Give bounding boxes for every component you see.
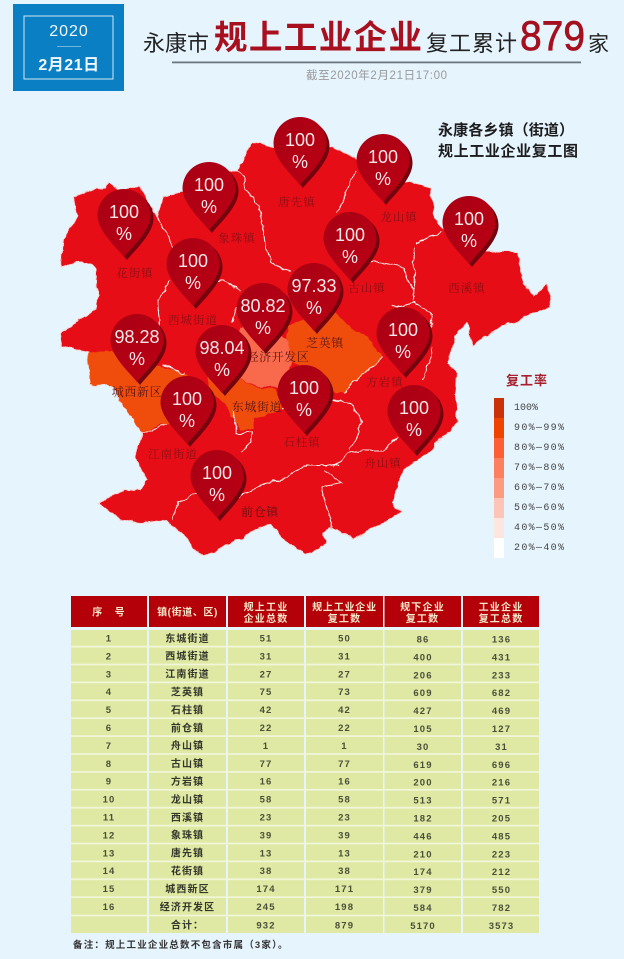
town name labels: 芝英镇: [306, 334, 344, 351]
table header: 复工数: [328, 612, 361, 625]
pin: 舟山镇 100%: [388, 385, 444, 456]
row 10: 513: [413, 796, 433, 807]
row 13: 13: [103, 848, 115, 859]
row 5: [106, 703, 511, 717]
row 12: [103, 829, 511, 842]
legend colour scale: [494, 398, 504, 558]
row 11: 23: [338, 812, 351, 824]
row 12: 12: [103, 830, 115, 841]
map heading: 永康各乡镇（街道）: [438, 121, 574, 139]
pin: 古山镇 100%: 100: [335, 225, 365, 245]
title: 规上工业企业: [214, 20, 422, 57]
row 2: 400: [413, 652, 433, 663]
row 2: 431: [492, 652, 511, 663]
row 2: 西城街道: [165, 650, 210, 663]
pin: 前仓镇 100%: %: [209, 485, 225, 505]
pin: 东城街道 98.04%: [196, 325, 252, 396]
total row: 3573: [489, 921, 514, 932]
region: 芝英镇 (90%–99%): [287, 310, 383, 393]
pin: 舟山镇 100%: 100: [399, 398, 429, 418]
row 16: 16: [103, 902, 115, 913]
row 10: 10: [103, 795, 115, 806]
row 3: 3: [106, 669, 112, 680]
pin: 芝英镇 97.33%: [288, 263, 344, 334]
table header: 规下企业: [400, 600, 445, 614]
table header: 复工总数: [479, 612, 523, 625]
row 7: 31: [495, 742, 508, 753]
row 4: 609: [413, 688, 433, 699]
town name labels: 唐先镇: [278, 194, 316, 210]
row 10: 571: [492, 796, 511, 807]
pin: 龙山镇 100%: [356, 134, 412, 205]
row 4: [106, 686, 511, 699]
row 14: 38: [260, 866, 272, 877]
row 8: 8: [106, 759, 112, 770]
row 4: 73: [338, 687, 351, 698]
pin: 芝英镇 97.33%: 97.33: [291, 276, 337, 296]
pin: 方岩镇 100%: [376, 307, 432, 378]
pin: 方岩镇 100%: %: [395, 342, 411, 362]
legend labels: [514, 403, 564, 554]
pin: 城西新区 98.28%: 98.28: [114, 327, 160, 347]
town name labels: 东城街道: [232, 398, 282, 415]
row 4: 芝英镇: [171, 686, 204, 698]
pin: 经济开发区 80.82%: 80.82: [240, 296, 286, 316]
row 5: 5: [106, 705, 112, 716]
row 9: 9: [106, 777, 112, 788]
row 9: [106, 775, 511, 789]
map heading: 规上工业企业复工图: [438, 142, 578, 160]
row 16: 198: [335, 902, 354, 913]
town name labels: 前仓镇: [241, 503, 279, 520]
pin: 石柱镇 100%: 100: [289, 378, 319, 398]
title: 复工累计: [426, 31, 517, 56]
pin: 方岩镇 100%: 100: [388, 320, 418, 340]
town name labels: 江南街道: [148, 446, 198, 462]
pin: 江南街道 100%: 100: [172, 389, 202, 409]
date badge: 2月21日: [38, 57, 100, 74]
date badge: [13, 4, 124, 91]
pin: 象珠镇 100%: [182, 162, 238, 233]
legend labels: 100%: [514, 403, 538, 414]
row 6: 22: [260, 723, 272, 734]
row 12: 39: [338, 830, 351, 841]
pin: 芝英镇 97.33%: %: [306, 298, 322, 318]
row 11: [103, 811, 511, 824]
data table: [71, 596, 539, 933]
legend labels: 50%—60%: [514, 503, 564, 514]
region: 东城街道 (90%–99%): [207, 377, 283, 430]
row 9: 16: [260, 777, 272, 788]
legend labels: 70%—80%: [514, 463, 564, 474]
row 16: 245: [256, 902, 276, 913]
title: [143, 12, 609, 59]
row 8: 696: [492, 760, 511, 771]
town name labels: 花街镇: [116, 265, 154, 281]
row 4: 4: [106, 687, 112, 698]
row 16: 782: [492, 903, 511, 914]
row 6: [106, 721, 511, 735]
row 9: 216: [492, 778, 511, 789]
row 1: 86: [417, 634, 429, 646]
total row: 合计：: [171, 918, 204, 932]
pin: 西溪镇 100%: 100: [454, 209, 484, 229]
row 14: 花街镇: [171, 864, 204, 878]
pin: 西城街道 100%: 100: [178, 251, 208, 271]
row 6: 105: [413, 724, 433, 735]
row 7: 7: [106, 741, 112, 752]
row 13: 唐先镇: [171, 847, 204, 860]
pin: 西溪镇 100%: %: [461, 231, 477, 251]
table body background: [71, 630, 539, 933]
row 7: 舟山镇: [171, 739, 204, 752]
row 15: 15: [103, 884, 115, 895]
row 15: [103, 882, 511, 896]
pin: 西城街道 100%: [166, 238, 222, 309]
row 15: 171: [335, 884, 354, 895]
row 12: 446: [413, 831, 433, 842]
row 10: 龙山镇: [171, 793, 204, 806]
footnote: 备注：规上工业企业总数不包含市属（3家）。: [73, 939, 289, 951]
total row: 932: [256, 920, 276, 932]
row 1: 1: [106, 634, 112, 644]
pin: 西溪镇 100%: [442, 196, 498, 267]
row 15: 174: [256, 884, 276, 895]
pin: 象珠镇 100%: 100: [194, 175, 224, 195]
row 6: 6: [106, 723, 112, 734]
title: 永康市: [143, 31, 209, 56]
row 7: 1: [341, 741, 348, 752]
pin: 江南街道 100%: %: [179, 411, 195, 431]
legend labels: 40%—50%: [514, 523, 564, 534]
row 12: 485: [492, 831, 511, 842]
row 1: [106, 632, 511, 646]
pin: 花街镇 100%: %: [116, 224, 132, 244]
subtitle: data cut-off time: 截至2020年2月21日17:00: [306, 68, 447, 82]
town name labels: 象珠镇: [218, 230, 256, 246]
row 16: 584: [413, 903, 433, 914]
row 9: 方岩镇: [171, 775, 204, 788]
row 5: 42: [338, 705, 351, 716]
legend labels: 20%—40%: [514, 543, 564, 554]
town name labels: 龙山镇: [380, 209, 418, 225]
pin: 江南街道 100%: [160, 376, 216, 447]
row 1: 136: [492, 634, 511, 646]
pin: 前仓镇 100%: [190, 450, 246, 521]
pin: 唐先镇 100%: %: [292, 152, 308, 172]
pin: 前仓镇 100%: 100: [202, 463, 232, 483]
title rule: [172, 62, 581, 63]
row 2: 31: [338, 651, 351, 662]
row 12: 39: [260, 830, 272, 841]
row 10: [103, 793, 511, 807]
town name labels: 舟山镇: [364, 455, 402, 471]
row 16: 经济开发区: [160, 900, 215, 913]
row 14: [103, 864, 511, 878]
town name labels: 古山镇: [348, 280, 386, 296]
row 12: 象珠镇: [171, 829, 204, 842]
town name labels: 石柱镇: [283, 434, 321, 450]
map fills and boundaries: [60, 142, 550, 557]
town name labels: [112, 194, 486, 520]
pin: 石柱镇 100%: [278, 365, 334, 436]
row 5: 469: [492, 706, 511, 717]
pin: 西城街道 100%: %: [185, 273, 201, 293]
row 11: 西溪镇: [171, 811, 204, 824]
table header: 复工数: [406, 612, 439, 625]
row 11: 11: [103, 812, 115, 824]
pin: 经济开发区 80.82%: [236, 283, 292, 354]
row 15: 城西新区: [165, 882, 210, 895]
legend title: 复工率: [506, 373, 548, 388]
row 8: 77: [338, 759, 351, 770]
row 7: 30: [417, 742, 429, 753]
pin: 唐先镇 100%: 100: [285, 130, 315, 150]
row 14: 212: [492, 867, 511, 878]
legend labels: 80%—90%: [514, 443, 564, 454]
row 4: 75: [260, 687, 272, 698]
row 10: 58: [260, 795, 272, 806]
legend: resumption rate: [494, 373, 564, 558]
pin: 城西新区 98.28%: [110, 314, 166, 385]
row 5: 42: [260, 705, 272, 716]
row 13: 210: [413, 849, 433, 860]
row 3: 233: [492, 670, 511, 681]
row 8: 古山镇: [171, 757, 204, 770]
table header: 工业企业: [479, 600, 523, 614]
pin: 古山镇 100%: [324, 212, 380, 283]
town boundaries: [142, 170, 442, 527]
town name labels: 经济开发区: [246, 348, 310, 365]
row 5: 427: [413, 706, 433, 717]
row 11: 205: [492, 814, 511, 824]
row 6: 22: [338, 723, 351, 734]
table header: [71, 596, 539, 627]
pin: 龙山镇 100%: %: [375, 169, 391, 189]
total row: 879: [335, 920, 354, 932]
row 13: 223: [492, 849, 511, 860]
row 4: 682: [492, 688, 511, 699]
row 13: [103, 847, 511, 860]
map heading: [438, 121, 578, 160]
row 5: 石柱镇: [171, 703, 204, 716]
row 3: [106, 668, 511, 681]
pin: 城西新区 98.28%: %: [129, 349, 145, 369]
legend labels: 90%—99%: [514, 423, 564, 434]
row 14: 38: [338, 866, 351, 877]
date badge: 2020: [49, 23, 89, 40]
row 2: 31: [260, 651, 272, 662]
pin: 唐先镇 100%: [274, 117, 330, 188]
town name labels: 西溪镇: [448, 280, 486, 296]
row 6: 前仓镇: [171, 721, 204, 734]
row 1: 东城街道: [165, 632, 210, 645]
row 1: 51: [260, 634, 272, 644]
row 15: 379: [413, 885, 433, 896]
table header: 镇(街道、区): [157, 606, 218, 618]
pin: 石柱镇 100%: %: [296, 400, 312, 420]
row 11: 23: [260, 812, 272, 824]
total row: 5170: [410, 921, 436, 932]
row 8: [106, 757, 511, 771]
row 6: 127: [492, 724, 511, 735]
pin: 象珠镇 100%: %: [201, 197, 217, 217]
row 3: 27: [260, 669, 272, 680]
pin: 花街镇 100%: 100: [109, 202, 139, 222]
row 10: 58: [338, 795, 351, 806]
pin: 古山镇 100%: %: [342, 247, 358, 267]
row 7: 1: [263, 741, 269, 752]
row 16: [103, 900, 511, 914]
legend labels: 60%—70%: [514, 483, 564, 494]
row 2: 2: [106, 651, 112, 662]
row 9: 16: [338, 777, 351, 788]
row 11: 182: [413, 814, 433, 824]
table header: 序 号: [92, 606, 126, 618]
region: 经济开发区 (80%–90%): [232, 325, 293, 388]
row 1: 50: [338, 634, 351, 644]
row 3: 江南街道: [165, 668, 210, 681]
title: 家: [588, 33, 609, 56]
row 7: [106, 739, 508, 753]
pin: 东城街道 98.04%: %: [214, 360, 230, 380]
pin: 花街镇 100%: [98, 189, 154, 260]
pin: 东城街道 98.04%: 98.04: [199, 338, 245, 358]
town name labels: 西城街道: [168, 312, 218, 328]
map base: towns at 100%: [60, 142, 550, 557]
region: 城西新区 (90%–99%): [88, 352, 207, 433]
table header: 企业总数: [244, 612, 288, 625]
pin: 龙山镇 100%: 100: [368, 147, 398, 167]
pin: 舟山镇 100%: %: [406, 420, 422, 440]
total row: [171, 918, 514, 932]
row 15: 550: [492, 885, 511, 896]
town name labels: 城西新区: [112, 383, 162, 400]
row 14: 174: [413, 867, 433, 878]
town name labels: 方岩镇: [366, 374, 404, 390]
map of Yongkang towns: [60, 117, 550, 557]
row 14: 14: [103, 866, 115, 877]
table header: 规上工业: [244, 600, 288, 614]
row 13: 13: [260, 848, 272, 859]
row 8: 77: [260, 759, 272, 770]
row 8: 619: [413, 760, 433, 771]
table header: 规上工业企业: [312, 600, 377, 614]
row 13: 13: [338, 848, 351, 859]
pin: 经济开发区 80.82%: %: [255, 318, 271, 338]
row 3: 27: [338, 669, 351, 680]
row 2: [106, 650, 511, 663]
row 3: 206: [413, 670, 433, 681]
title: 879: [520, 12, 585, 59]
row 9: 200: [413, 778, 433, 789]
